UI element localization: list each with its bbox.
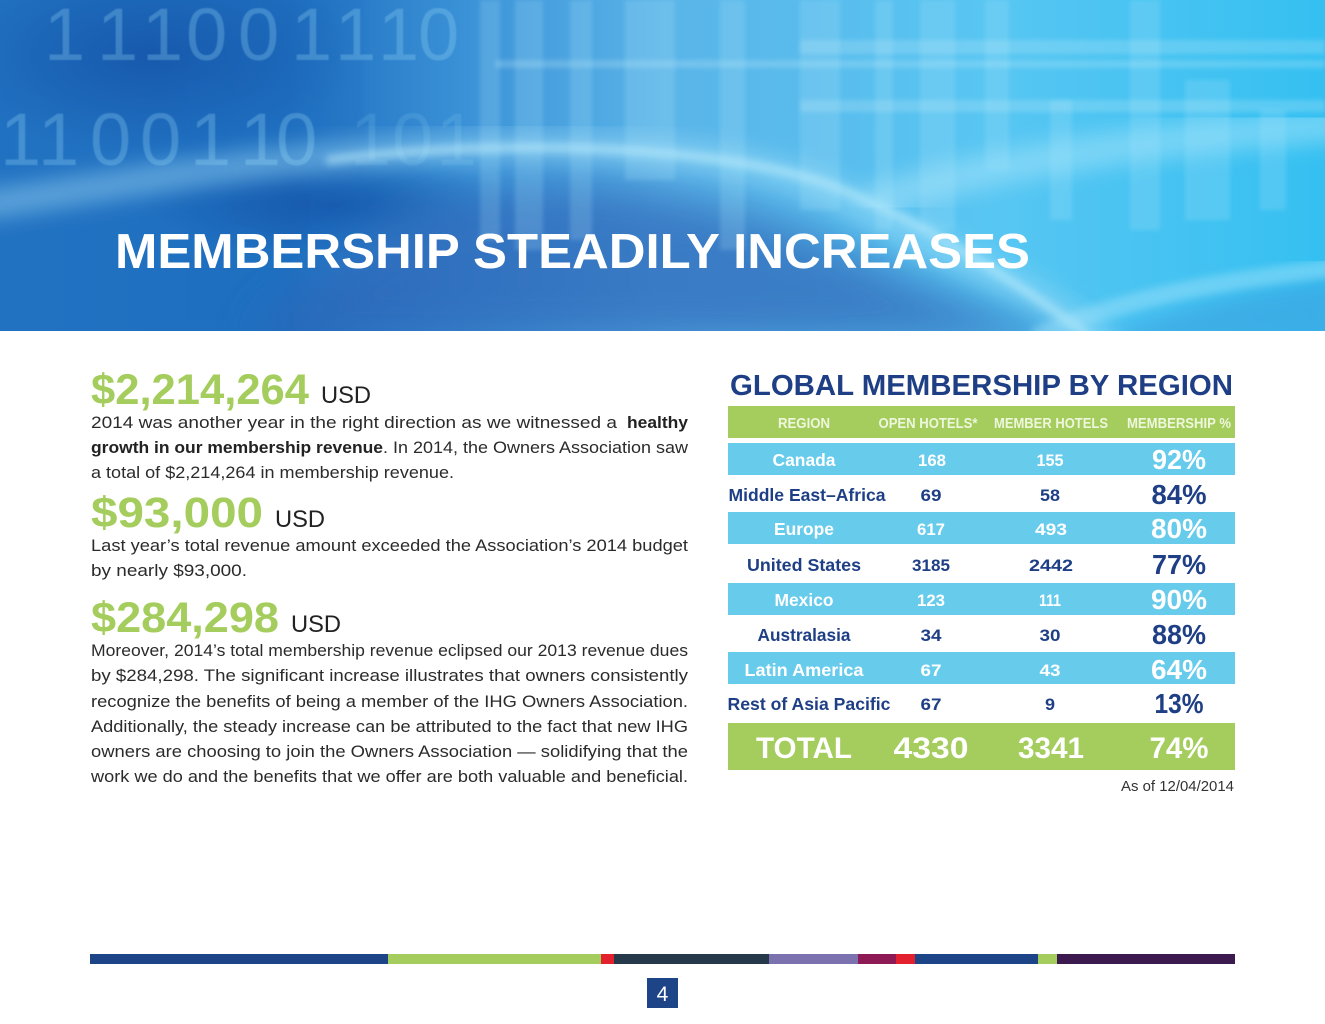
total row: 74% [1150,732,1208,765]
table header row: REGION [778,416,830,432]
paragraph: by $284,298. The significant increase illustrates that owners consistently [91,667,689,685]
paragraph [90,642,689,786]
table header row: OPEN HOTELS* [878,416,978,432]
row: Australasia: 30 [1040,626,1060,645]
paragraph: a total of $2,214,264 in membership revenue. [91,464,454,482]
row: Europe: Europe [774,519,834,539]
total row [728,723,1235,770]
row: Latin America: Latin America [744,660,864,680]
row: Mexico [728,583,1235,615]
row: Rest of Asia Pacific [728,688,1204,719]
unit: USD [275,506,325,533]
row: Rest of Asia Pacific: 13% [1154,688,1204,719]
membership table [728,406,1235,770]
row: Australasia: 34 [920,626,942,645]
row: Mexico: 111 [1039,591,1061,610]
paragraph [91,537,688,580]
footer colour bar [90,954,1235,964]
row: Canada [728,443,1235,475]
paragraph: . In 2014, the Owners Association saw [383,439,688,457]
row: Mexico: Mexico [774,590,834,610]
table header row: MEMBER HOTELS [994,416,1108,432]
row: Middle East-Africa [728,479,1207,510]
row: Rest of Asia Pacific: Rest of Asia Pacific [728,694,891,714]
paragraph: growth in our membership revenue [91,439,383,457]
row: United States: 77% [1152,549,1206,580]
row: Europe: 493 [1035,520,1067,539]
row: United States: United States [747,555,861,575]
row: Canada: Canada [772,450,836,470]
paragraph: owners are choosing to join the Owners Association — solidifying that the [91,743,688,761]
paragraph: by nearly $93,000. [91,562,247,580]
total row: 4330 [894,732,968,765]
row: Latin America: 64% [1151,654,1207,685]
paragraph: Additionally, the steady increase can be attributed to the fact that new IHG [91,718,688,736]
light swooshes [0,125,1325,345]
paragraph: Moreover, 2014’s total membership revenue eclipsed our 2013 revenue dues [91,642,688,660]
row: Latin America: 67 [920,661,942,680]
stat block: $93,000 [91,489,688,580]
row: Latin America: 43 [1040,661,1060,680]
row: Mexico: 123 [917,591,945,610]
row: Rest of Asia Pacific: 9 [1045,695,1055,714]
row: Canada: 155 [1036,451,1064,470]
binary digits: 101 [350,98,477,181]
binary digits: 1100110 [0,98,317,181]
unit: USD [291,611,341,638]
paragraph: work we do and the benefits that we offer are both valuable and beneficial. [90,768,688,786]
stat block: $284,298 [90,594,689,786]
row: Middle East-Africa: 84% [1152,479,1207,510]
total row: TOTAL [756,732,852,765]
unit: USD [321,382,371,409]
page number: 4 [657,983,669,1006]
table header row [728,406,1235,438]
row: Middle East-Africa: 58 [1040,486,1060,505]
row: Rest of Asia Pacific: 67 [920,695,942,714]
table header row: MEMBERSHIP % [1127,416,1231,432]
row: Europe [728,512,1235,544]
row: Europe: 80% [1151,513,1207,544]
paragraph: recognize the benefits of being a member of the IHG Owners Association. [91,693,688,711]
as-of note: As of 12/04/2014 [1121,779,1234,795]
row: Australasia: Australasia [758,625,851,645]
table heading: GLOBAL MEMBERSHIP BY REGION [730,370,1233,402]
row: Latin America [728,652,1235,685]
row: United States: 2442 [1029,556,1073,575]
row: Middle East-Africa: Middle East–Africa [728,485,886,505]
row: Middle East-Africa: 69 [920,486,942,505]
paragraph [91,414,689,482]
paragraph: healthy [627,414,689,432]
total row: 3341 [1018,732,1084,765]
title: MEMBERSHIP STEADILY INCREASES [115,225,1030,279]
row: Canada: 92% [1152,444,1206,475]
page number [647,978,678,1008]
header banner [0,0,1325,345]
stat figure: $93,000 [91,489,263,537]
row: Australasia [758,619,1206,650]
row: Australasia: 88% [1152,619,1206,650]
stat figure: $284,298 [91,594,279,642]
stat block: $2,214,264 [91,366,689,482]
binary digits [5,8,473,166]
row: United States [747,549,1206,580]
row: Mexico: 90% [1151,584,1207,615]
paragraph: Last year’s total revenue amount exceeded the Association’s 2014 budget [91,537,688,555]
row: Europe: 617 [917,520,945,539]
row: United States: 3185 [912,556,950,575]
paragraph: 2014 was another year in the right direction as we witnessed a [91,414,618,432]
row: Canada: 168 [918,451,946,470]
stat figure: $2,214,264 [91,366,309,414]
